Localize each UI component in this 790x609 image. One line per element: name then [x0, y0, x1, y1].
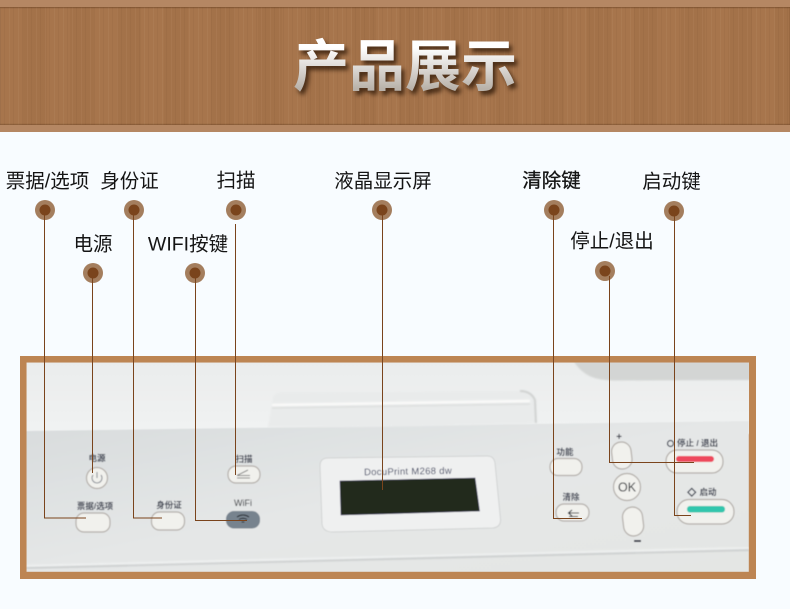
handle recess: [268, 391, 536, 427]
scan button: [228, 454, 260, 483]
power button: 电源: [88, 453, 106, 463]
function button: [550, 447, 582, 476]
ticket options button: [76, 501, 114, 532]
callout: ID card: [100, 170, 162, 518]
callout: power: 电源: [73, 234, 113, 256]
callout: ticket options: 票据/选项: [6, 170, 89, 192]
ID card button: [152, 500, 184, 530]
display bezel: [320, 456, 501, 532]
lower edge of the panel: [26, 548, 749, 568]
callout: power: [73, 234, 113, 473]
callout: LCD screen: 液晶显示屏: [334, 170, 432, 192]
callout: scan: [216, 170, 256, 475]
WiFi button: WiFi: [234, 498, 252, 508]
callout: ID card: 身份证: [100, 170, 159, 192]
model name: DocuPrint M268 dw: [364, 466, 452, 478]
callout: WiFi key: [148, 234, 247, 520]
top right shadow: [574, 362, 750, 380]
clear button: [556, 492, 589, 521]
callout: LCD screen: [334, 170, 432, 490]
callout: stop / exit: 停止/退出: [570, 230, 654, 252]
wood texture panel: [0, 7, 790, 125]
WiFi button: [226, 498, 260, 528]
callout: WiFi key: WIFI按键: [148, 234, 228, 256]
callout: scan: 扫描: [216, 170, 256, 192]
start button: [677, 487, 734, 524]
start button: 启动: [699, 487, 717, 497]
callout: start key: [642, 171, 701, 516]
plus button: +: [616, 432, 622, 443]
callout: ticket options: [6, 170, 89, 518]
lower control surface: [26, 421, 749, 572]
callout: start key: 启动键: [642, 171, 701, 193]
stop / exit button: 停止 / 退出: [677, 438, 718, 448]
ID card button: 身份证: [156, 500, 182, 510]
annotated control panel diagram: [6, 170, 756, 579]
ticket options button: 票据/选项: [77, 501, 114, 511]
callout: stop / exit: [570, 230, 694, 462]
power button: [86, 453, 108, 488]
title: 产品展示: [293, 35, 517, 98]
plus button: [610, 432, 633, 470]
minus button: [621, 506, 645, 542]
OK button: OK: [618, 480, 637, 494]
photo frame: [20, 356, 756, 579]
function button: 功能: [556, 447, 574, 457]
photo content: [26, 362, 750, 572]
OK button: [614, 474, 640, 500]
header banner: [0, 0, 790, 132]
scan button: 扫描: [235, 454, 253, 464]
callout: clear key: [522, 170, 582, 518]
clear button: 清除: [562, 492, 580, 502]
callout: clear key: 清除键: [522, 170, 581, 192]
printer upper body: [26, 362, 750, 434]
LCD screen: [340, 478, 480, 515]
stop / exit button: [666, 438, 723, 473]
printer photo: [26, 362, 750, 572]
